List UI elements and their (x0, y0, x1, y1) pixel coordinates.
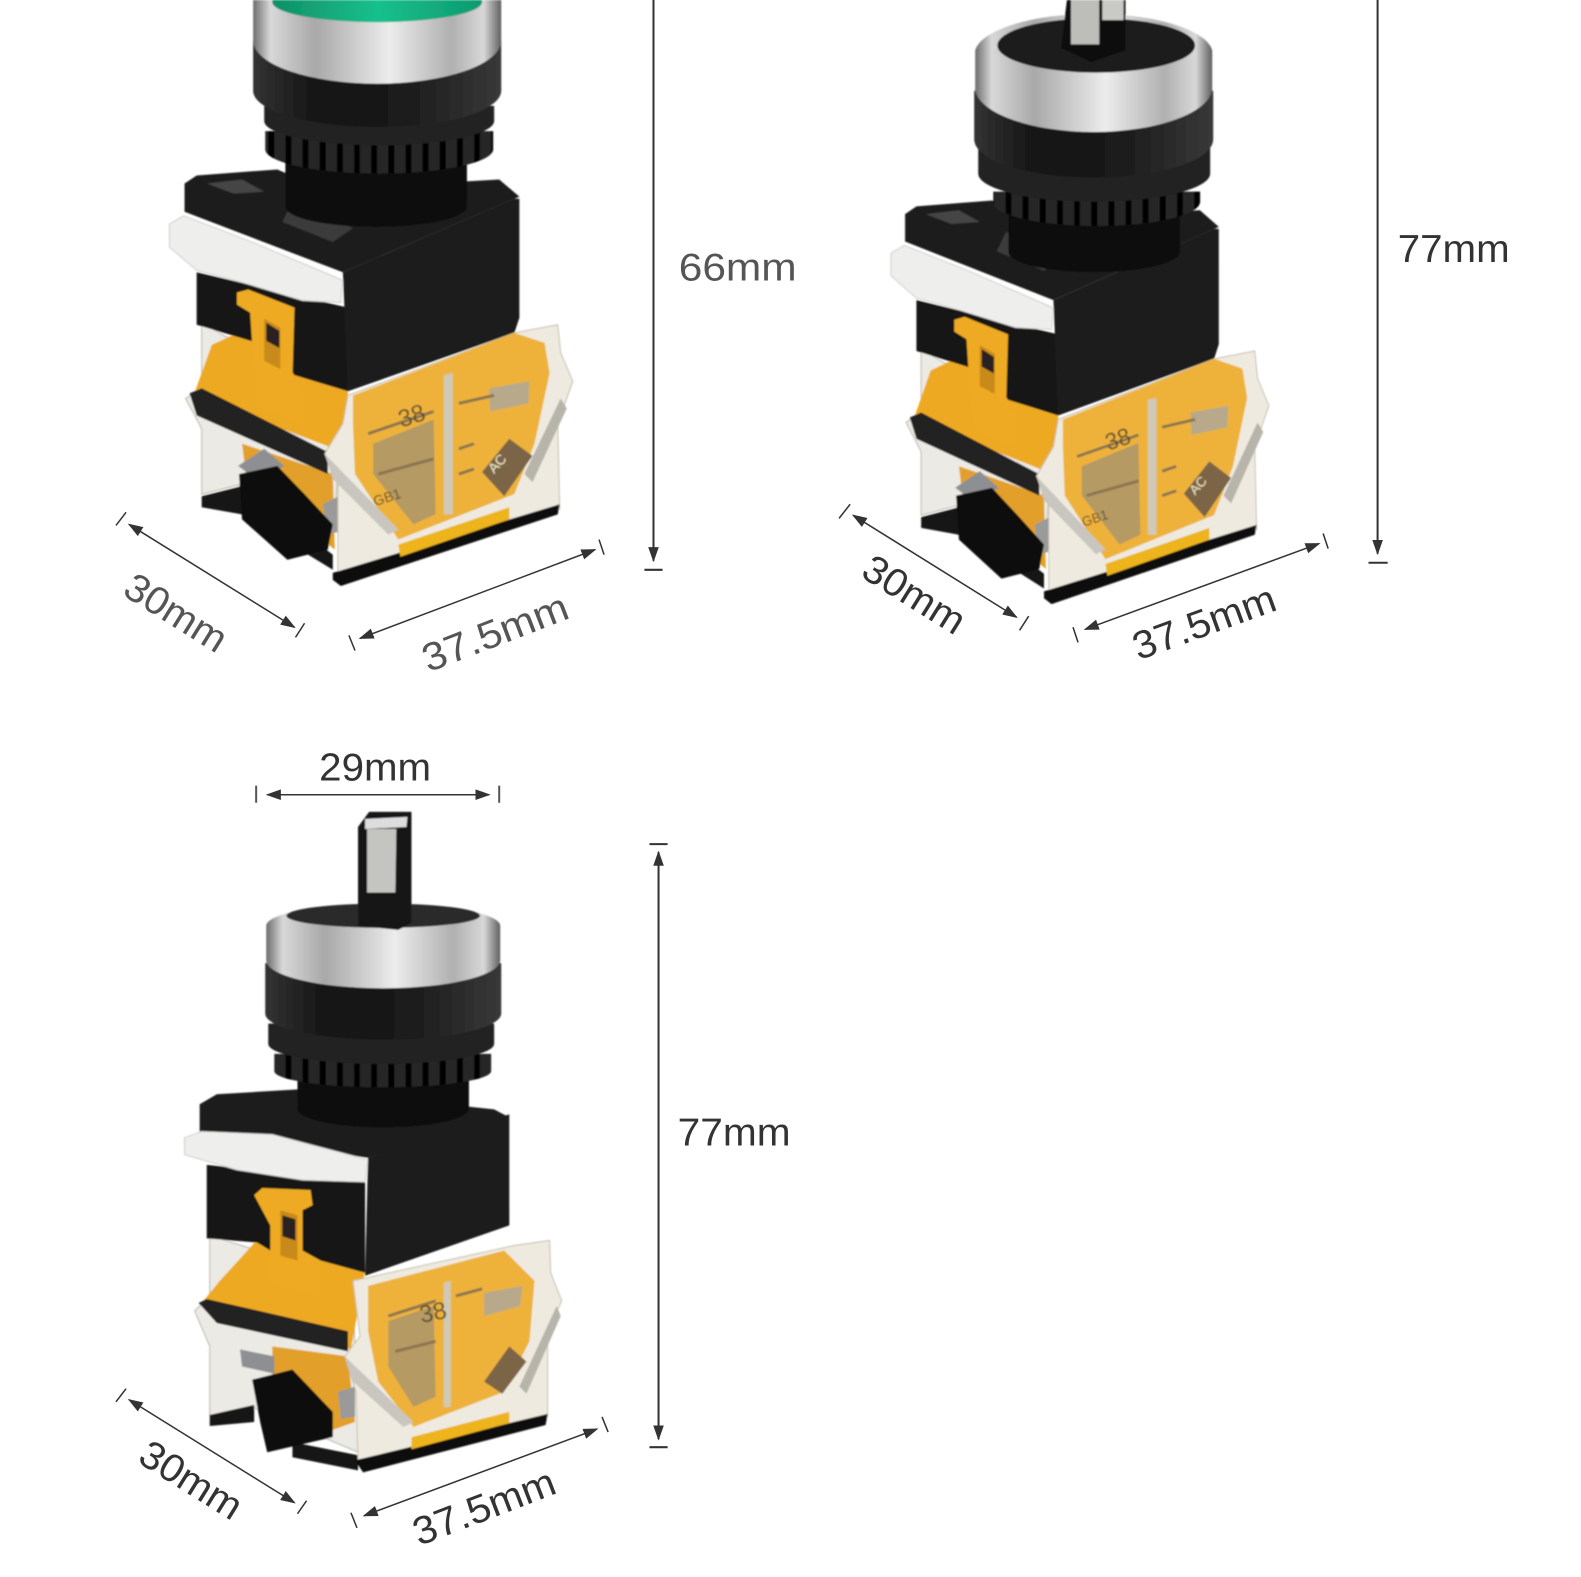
dimension: depth 30mm (116, 1389, 307, 1529)
switch photo: selector switch front view (185, 812, 562, 1472)
dimension: width 37.5mm (1073, 534, 1328, 669)
switch photo: green flat button (169, 0, 573, 586)
panel: rotary selector, lower left (116, 746, 791, 1555)
dimension: height 77mm: 77mm (678, 1111, 791, 1155)
dimension: depth 30mm: 30mm (131, 1432, 251, 1529)
dimension: depth 30mm (839, 504, 1029, 643)
switch photo: selector switch with black lower ring (891, 0, 1269, 604)
dimension: height 77mm (649, 844, 791, 1447)
dimension: diameter 29mm: 29mm (319, 746, 431, 790)
dimension: height 66mm: 66mm (679, 245, 797, 289)
dimension: width 37.5mm: 37.5mm (1127, 577, 1282, 669)
dimension: width 37.5mm (351, 1417, 608, 1555)
dimension: diameter 29mm (256, 746, 499, 803)
dimension: width 37.5mm: 37.5mm (416, 585, 575, 681)
dimension: depth 30mm: 30mm (855, 546, 974, 643)
dimension: width 37.5mm: 37.5mm (407, 1460, 562, 1555)
switch photo: selector switch front view: 38 (417, 1297, 449, 1329)
panel: rotary selector, upper right (839, 0, 1510, 669)
dimension: width 37.5mm (349, 540, 604, 681)
dimension: height 77mm: 77mm (1398, 227, 1510, 271)
panel: green push button dimensions (116, 0, 797, 681)
dimension: depth 30mm (116, 512, 305, 662)
dimension: depth 30mm: 30mm (116, 564, 235, 662)
